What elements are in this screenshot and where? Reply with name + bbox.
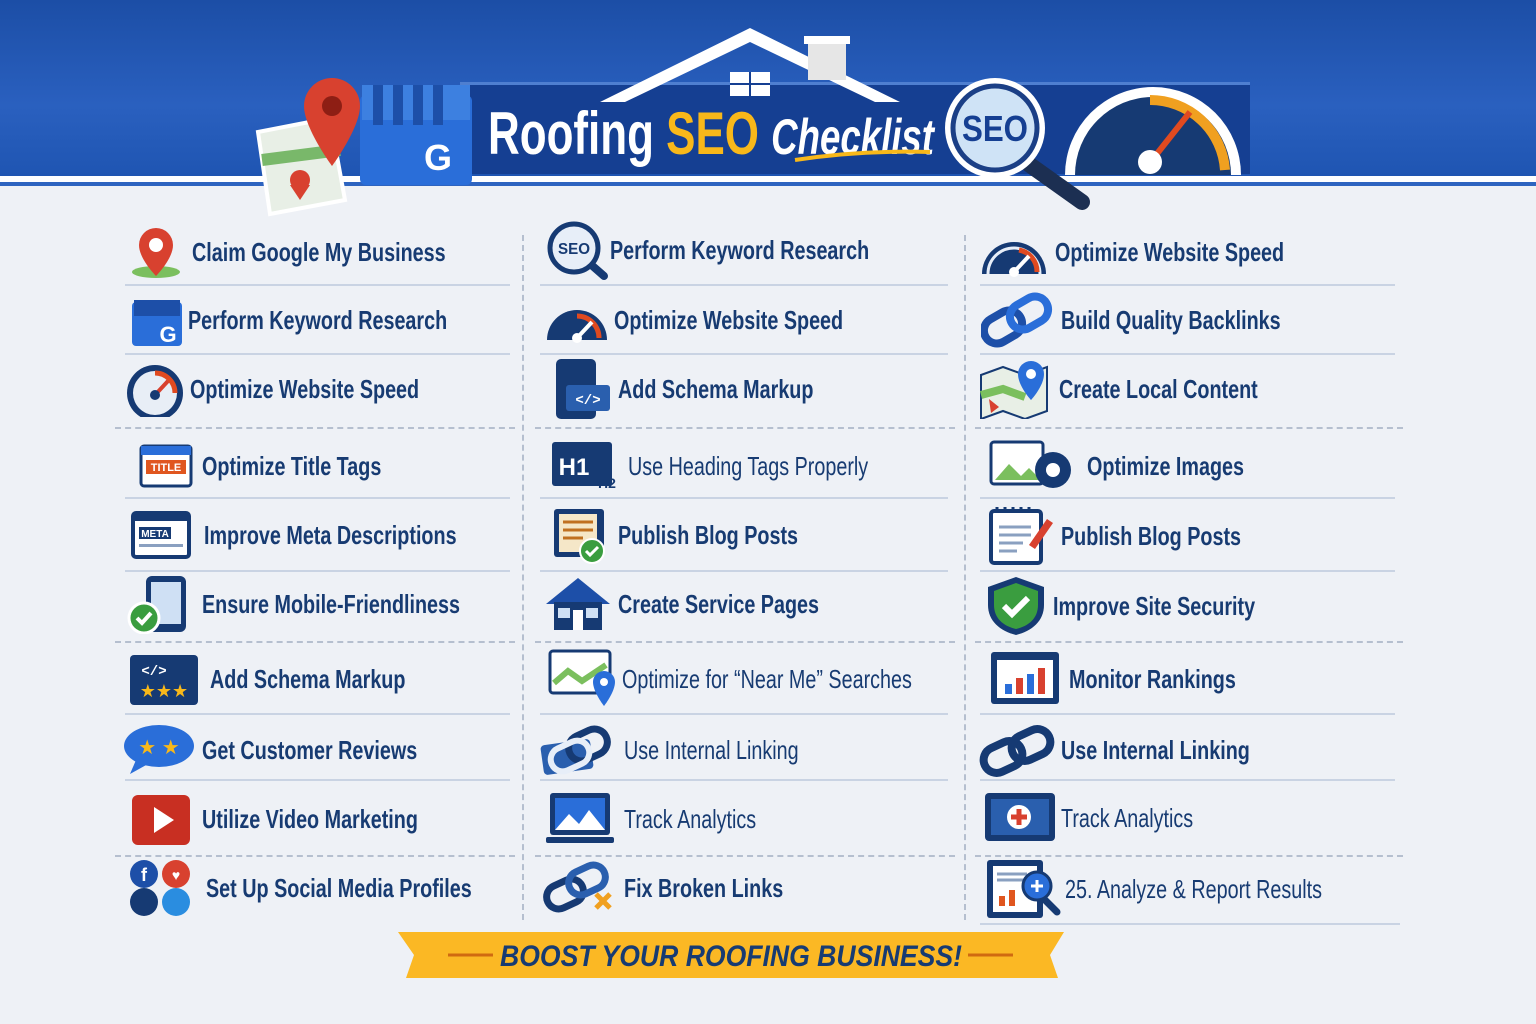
item: Set Up Social Media Profiles: ♥ bbox=[172, 867, 180, 883]
item: Optimize Website Speed: Optimize Website Speed bbox=[1055, 236, 1284, 266]
item: Optimize Website Speed: Optimize Website Speed bbox=[614, 304, 843, 334]
item: Optimize Title Tags: Optimize Title Tags bbox=[202, 450, 381, 480]
ribbon: Boost your roofing business: BOOST YOUR ROOFING BUSINESS! bbox=[500, 940, 962, 973]
item: Get Customer Reviews bbox=[124, 725, 417, 774]
item: Optimize Title Tags bbox=[140, 444, 381, 488]
item: Create Service Pages: Create Service Pages bbox=[618, 588, 819, 618]
item: Optimize for “Near Me” Searches: Optimize for “Near Me” Searches bbox=[622, 664, 912, 694]
item: Use Internal Linking bbox=[540, 726, 799, 775]
header illustration bbox=[256, 28, 1250, 216]
item: Perform Keyword Research: SEO bbox=[558, 241, 590, 258]
column 2 bbox=[540, 222, 912, 912]
item: Set Up Social Media Profiles: f bbox=[141, 865, 148, 885]
item: Build Quality Backlinks bbox=[981, 292, 1281, 348]
item: 25. Analyze & Report Results bbox=[987, 860, 1322, 918]
item: Publish Blog Posts: Publish Blog Posts bbox=[618, 520, 798, 550]
item: Improve Meta Descriptions: META bbox=[141, 529, 169, 540]
item: Create Local Content: Create Local Content bbox=[1059, 374, 1258, 404]
item: Improve Site Security bbox=[988, 577, 1255, 635]
item: Add Schema Markup bbox=[556, 359, 813, 419]
item: Perform Keyword Research: Perform Keyword Research bbox=[188, 304, 447, 334]
item: Claim Google My Business: Claim Google My Business bbox=[192, 236, 446, 266]
item: Get Customer Reviews: Get Customer Reviews bbox=[202, 734, 417, 764]
icon: magnifier SEO: SEO bbox=[962, 108, 1028, 149]
item: Get Customer Reviews: ★ ★ bbox=[138, 737, 180, 759]
item: Utilize Video Marketing bbox=[132, 795, 418, 845]
item: Use Heading Tags Properly: Use Heading Tags Properly bbox=[628, 450, 868, 480]
item: Set Up Social Media Profiles bbox=[130, 860, 472, 916]
header band bbox=[0, 0, 1536, 176]
item: Perform Keyword Research: Perform Keyword Research bbox=[610, 234, 869, 264]
column 1 bbox=[124, 228, 472, 916]
item: Optimize Images bbox=[990, 440, 1244, 488]
item: Add Schema Markup: </> bbox=[575, 393, 601, 409]
item: Optimize Website Speed bbox=[982, 236, 1284, 277]
item: Optimize Website Speed bbox=[127, 365, 419, 417]
item: Perform Keyword Research: G bbox=[159, 322, 177, 347]
item: Ensure Mobile-Friendliness: Ensure Mobile-Friendliness bbox=[202, 588, 460, 618]
separator lines bbox=[125, 284, 510, 286]
item: Claim Google My Business bbox=[132, 228, 446, 278]
title banner bbox=[460, 82, 1250, 174]
item: Monitor Rankings: Monitor Rankings bbox=[1069, 664, 1236, 694]
item: Track Analytics: Track Analytics bbox=[1061, 802, 1193, 832]
item: Use Internal Linking bbox=[980, 725, 1250, 777]
house roof bbox=[600, 28, 900, 102]
item: Create Local Content bbox=[980, 361, 1258, 419]
item: Fix Broken Links bbox=[543, 862, 783, 912]
item: Optimize Title Tags: TITLE bbox=[151, 462, 181, 474]
icon: speed gauge bbox=[1065, 87, 1241, 175]
item: Monitor Rankings bbox=[991, 652, 1236, 704]
icon: magnifier SEO bbox=[945, 78, 1082, 202]
item: Use Heading Tags Properly bbox=[552, 442, 868, 491]
item: Use Internal Linking: Use Internal Linking bbox=[624, 734, 799, 764]
item: Fix Broken Links: Fix Broken Links bbox=[624, 872, 783, 902]
item: 25. Analyze & Report Results: 25. Analyze & Report Results bbox=[1065, 874, 1322, 904]
item: Track Analytics bbox=[546, 793, 756, 843]
item: Improve Meta Descriptions bbox=[131, 511, 457, 559]
item: Perform Keyword Research bbox=[132, 300, 447, 347]
item: Improve Site Security: Improve Site Security bbox=[1053, 590, 1255, 620]
icon: map, pin and store: G bbox=[424, 137, 452, 178]
item: Track Analytics: Track Analytics bbox=[624, 804, 756, 834]
title: Roofing SEO Checklist bbox=[488, 100, 936, 167]
item: Create Service Pages bbox=[546, 578, 819, 630]
item: Add Schema Markup bbox=[130, 655, 405, 705]
icon: map, pin and store bbox=[258, 78, 472, 214]
item: Utilize Video Marketing: Utilize Video Marketing bbox=[202, 804, 418, 834]
item: Optimize Images: Optimize Images bbox=[1087, 450, 1244, 480]
item: Improve Meta Descriptions: Improve Meta Descriptions bbox=[204, 520, 457, 550]
item: Optimize Website Speed bbox=[547, 304, 843, 343]
item: Use Heading Tags Properly: H2 bbox=[598, 475, 616, 491]
item: Publish Blog Posts bbox=[989, 507, 1241, 565]
item: Add Schema Markup: </> bbox=[141, 664, 167, 680]
item: Use Heading Tags Properly: H1 bbox=[559, 454, 589, 481]
item: Build Quality Backlinks: Build Quality Backlinks bbox=[1061, 304, 1281, 334]
ribbon: Boost your roofing business bbox=[398, 932, 1064, 978]
item: Add Schema Markup: Add Schema Markup bbox=[618, 374, 813, 404]
item: Perform Keyword Research bbox=[548, 222, 869, 280]
item: Optimize for “Near Me” Searches bbox=[548, 650, 912, 706]
item: Set Up Social Media Profiles: Set Up Social Media Profiles bbox=[206, 872, 472, 902]
column 3 bbox=[980, 236, 1322, 918]
item: Add Schema Markup: Add Schema Markup bbox=[210, 664, 405, 694]
item: Track Analytics bbox=[985, 793, 1193, 841]
column dividers bbox=[522, 235, 524, 920]
item: Publish Blog Posts bbox=[554, 509, 798, 564]
item: Add Schema Markup: ★★★ bbox=[140, 681, 188, 701]
item: Ensure Mobile-Friendliness bbox=[128, 576, 460, 634]
item: Publish Blog Posts: Publish Blog Posts bbox=[1061, 520, 1241, 550]
item: Use Internal Linking: Use Internal Linking bbox=[1061, 734, 1250, 764]
item: Optimize Website Speed: Optimize Website Speed bbox=[190, 374, 419, 404]
